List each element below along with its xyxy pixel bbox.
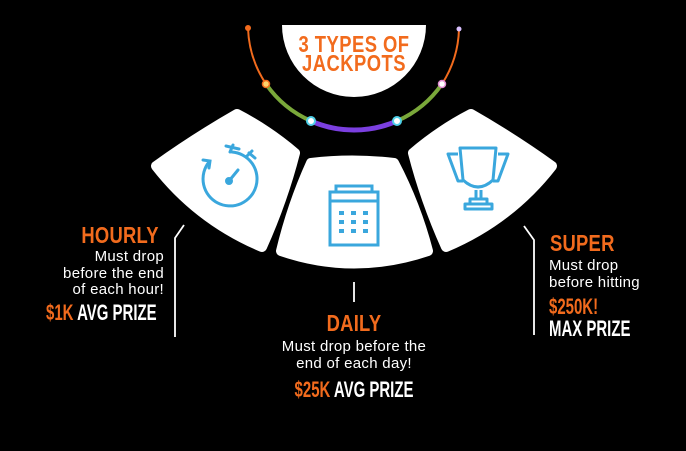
text: hourly description: before the end xyxy=(63,264,164,282)
text: daily description: end of each day! xyxy=(296,354,412,372)
text: hourly description xyxy=(63,248,164,298)
heading: hourly: HOURLY xyxy=(82,222,159,248)
card: super xyxy=(413,114,552,247)
decorative arc xyxy=(245,25,462,130)
heading: super: SUPER xyxy=(550,230,615,256)
card: daily xyxy=(281,160,428,264)
text: hourly description: of each hour! xyxy=(73,281,164,298)
prize: daily: $25K AVG PRIZE xyxy=(295,377,413,402)
title badge: JACKPOTS xyxy=(302,51,406,77)
block: hourly xyxy=(46,222,164,325)
icon: stopwatch xyxy=(203,145,257,206)
card: hourly xyxy=(156,114,295,247)
prize: super: $250K! xyxy=(549,294,598,319)
icon: calendar xyxy=(330,186,378,245)
icon: trophy xyxy=(448,148,508,209)
text: super description: Must drop xyxy=(549,257,618,274)
text: daily description xyxy=(282,338,426,372)
block: super xyxy=(549,230,640,341)
text: super description: before hitting xyxy=(549,274,640,290)
text: daily description: Must drop before the xyxy=(282,338,426,355)
block: daily xyxy=(282,310,426,402)
prize: super xyxy=(549,294,630,341)
title badge: 3 TYPES OF xyxy=(298,32,410,58)
connector lines xyxy=(175,225,534,337)
text: super description xyxy=(549,257,640,290)
title badge xyxy=(282,25,426,97)
prize: super: MAX PRIZE xyxy=(549,316,630,341)
text: hourly description: Must drop xyxy=(95,248,164,265)
prize: hourly: $1K AVG PRIZE xyxy=(46,300,157,325)
heading: daily: DAILY xyxy=(327,310,381,336)
